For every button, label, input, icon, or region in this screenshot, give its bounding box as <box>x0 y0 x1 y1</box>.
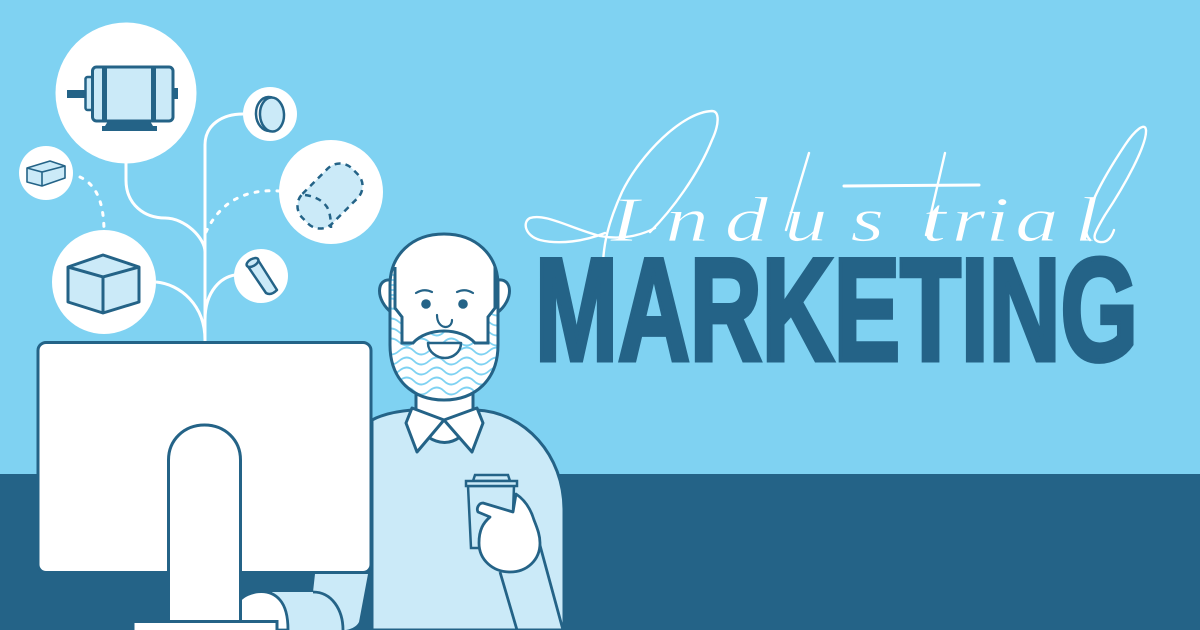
decorative swash strokes <box>526 111 1146 262</box>
ears <box>380 280 510 313</box>
face details <box>416 290 473 358</box>
sweater body <box>372 410 564 630</box>
icon: small box <box>19 146 73 200</box>
icon: dashed capsule <box>279 140 383 244</box>
shirt collar <box>406 408 483 452</box>
branching connector lines <box>80 114 280 344</box>
icon: coin <box>243 87 297 141</box>
sleeve lines <box>500 527 563 630</box>
icon: motor <box>56 22 196 164</box>
coffee cup <box>466 475 517 548</box>
dark floor band <box>0 474 1200 630</box>
icon: cube <box>52 230 156 334</box>
monitor screen <box>38 342 371 572</box>
heading: Industrial <box>526 111 1146 262</box>
monitor stand <box>168 425 240 630</box>
icon: tube <box>234 249 288 303</box>
monitor base <box>133 622 277 630</box>
head and beard <box>384 234 504 400</box>
heading: Industrial: Industrial <box>609 185 1099 255</box>
character <box>372 234 564 630</box>
lower arm <box>240 574 368 630</box>
neck <box>416 390 473 442</box>
hand holding cup <box>477 494 540 572</box>
